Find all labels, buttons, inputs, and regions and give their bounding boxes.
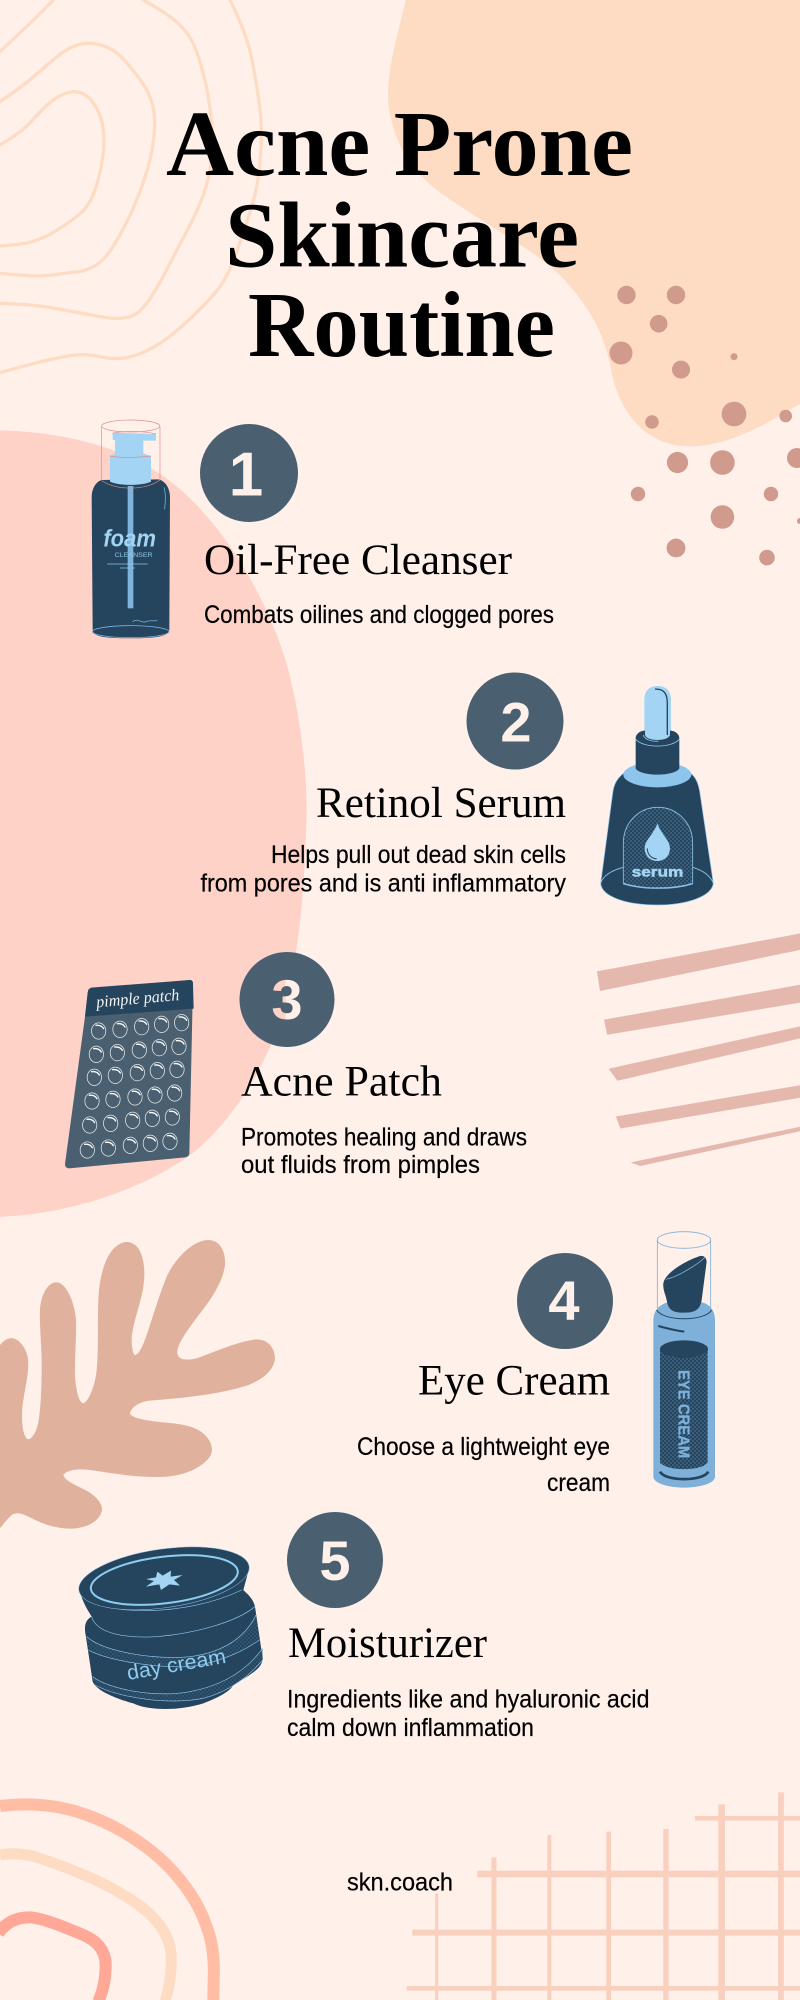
dots cluster	[610, 286, 800, 565]
contour lines top left	[0, 0, 261, 373]
number badge 1: 1	[229, 440, 263, 510]
text: eye cream description: cream	[547, 1469, 610, 1497]
grid lines bottom right	[407, 1792, 800, 2000]
text: patch description: Promotes healing and draws	[241, 1124, 527, 1152]
icon: pimple patch sheet	[65, 980, 194, 1168]
heading: Moisturizer: Moisturizer	[288, 1620, 487, 1667]
icon: day cream jar	[75, 1537, 263, 1709]
icon: eye cream tube: EYE CREAM	[674, 1370, 691, 1458]
diagonal stripes right	[597, 933, 800, 1166]
number badge 2	[466, 672, 564, 770]
heading: Oil-Free Cleanser: Oil-Free Cleanser	[204, 537, 512, 584]
title: Skincare	[225, 184, 579, 288]
leaf shape	[0, 1240, 275, 1529]
text: serum description: from pores and is anti inflammatory	[200, 870, 566, 898]
text: patch description: out fluids from pimples	[241, 1151, 480, 1179]
number badge 5: 5	[319, 1529, 351, 1592]
heading: Retinol Serum: Retinol Serum	[316, 780, 566, 827]
step 2	[200, 672, 566, 898]
step 3	[240, 952, 527, 1179]
text: moisturizer description: Ingredients like and hyaluronic acid	[287, 1686, 650, 1714]
text: eye cream description	[357, 1433, 610, 1497]
heading: Acne Patch: Acne Patch	[241, 1058, 442, 1106]
icon: foam cleanser bottle: foam	[103, 526, 156, 553]
text: serum description	[200, 841, 566, 898]
step 4	[357, 1253, 613, 1497]
icon: serum bottle	[601, 686, 713, 905]
number badge 2: 2	[500, 690, 532, 754]
text: moisturizer description: calm down inflammation	[287, 1714, 534, 1742]
text: moisturizer description	[287, 1686, 650, 1742]
icon: day cream jar: day cream	[125, 1645, 228, 1685]
text: patch description	[241, 1124, 527, 1179]
text: cleanser description: Combats oilines and clogged pores	[204, 601, 554, 629]
title: Routine	[248, 274, 555, 377]
background blob: peach	[388, 0, 800, 446]
number badge 5	[287, 1512, 383, 1608]
footer brand: skn.coach	[347, 1868, 453, 1896]
number badge 3: 3	[271, 968, 303, 1031]
background blob: pink	[0, 430, 307, 1217]
number badge 4	[517, 1253, 613, 1349]
icon: foam cleanser bottle	[92, 420, 170, 638]
title: Acne Prone	[166, 93, 633, 196]
number badge 1	[200, 424, 298, 522]
heading: Eye Cream: Eye Cream	[418, 1358, 610, 1404]
text: eye cream description: Choose a lightweight eye	[357, 1433, 610, 1461]
icon: serum bottle: serum	[632, 864, 683, 880]
icon: eye cream tube	[653, 1232, 715, 1488]
title	[166, 93, 633, 377]
text: serum description: Helps pull out dead skin cells	[271, 841, 566, 869]
number badge 4: 4	[548, 1269, 580, 1332]
number badge 3	[240, 952, 334, 1047]
icon: pimple patch sheet: pimple patch	[94, 985, 180, 1011]
icon: foam cleanser bottle: CLEANSER	[115, 552, 153, 559]
step 5	[287, 1512, 650, 1742]
concentric arcs bottom left	[0, 1804, 214, 2000]
step 1	[200, 424, 554, 629]
